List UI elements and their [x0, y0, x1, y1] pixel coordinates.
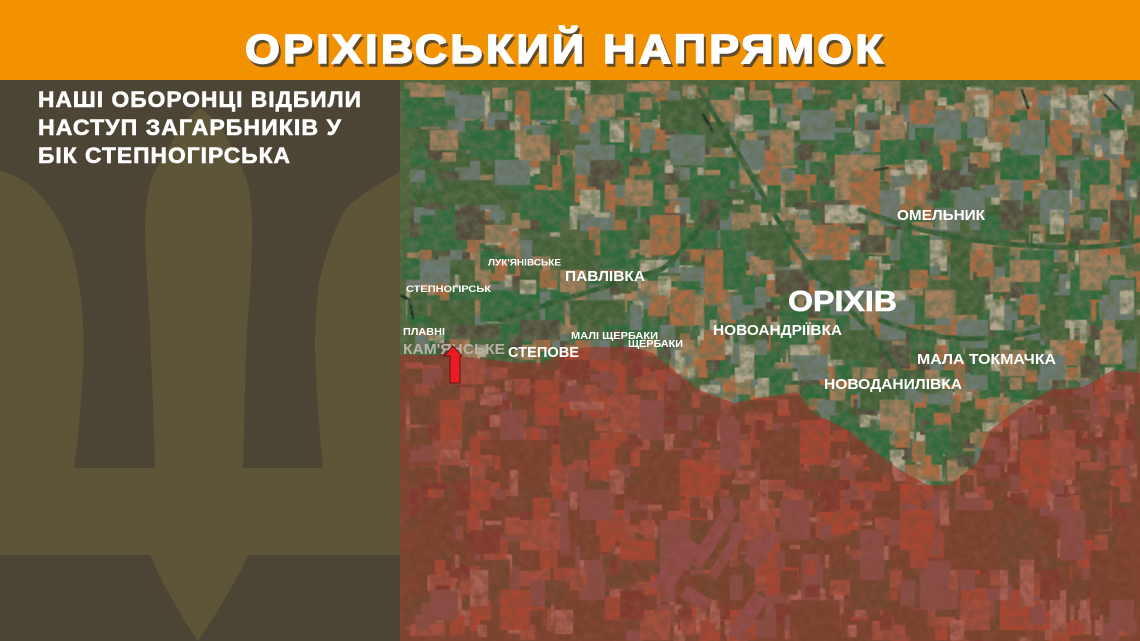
map labels: settlements: МАЛА ТОКМАЧКА	[917, 351, 1056, 368]
map labels: settlements	[403, 207, 1056, 393]
map labels: settlements: ПАВЛІВКА	[565, 268, 645, 285]
map labels: settlements: МАЛІ ЩЕРБАКИ	[571, 331, 658, 342]
text block: summary: НАШІ ОБОРОНЦІ ВІДБИЛИ	[38, 87, 362, 112]
map labels: settlements: НОВОДАНИЛІВКА	[824, 376, 962, 393]
map labels: settlements: ОРІХІВ	[788, 286, 897, 318]
text block: summary	[38, 87, 362, 168]
map labels: settlements: СТЕПНОГІРСЬК	[406, 284, 491, 295]
icon: trident watermark	[0, 108, 400, 641]
map: town texture	[400, 80, 1140, 641]
map fields: diagonal strips in the south	[652, 508, 779, 641]
map labels: settlements: ОМЕЛЬНИК	[897, 207, 986, 224]
map labels: settlements: НОВОАНДРІЇВКА	[713, 322, 843, 339]
map labels: settlements: СТЕПОВЕ	[508, 345, 579, 361]
map labels: settlements: ЩЕРБАКИ	[628, 339, 683, 350]
panel: left olive sidebar	[0, 80, 400, 641]
map fields: farmland patchwork	[402, 81, 1140, 641]
text block: summary: БІК СТЕПНОГІРСЬКА	[38, 143, 291, 168]
map labels: settlements: ПЛАВНІ	[403, 327, 445, 338]
map labels: settlements: КАМ'ЯНСЬКЕ	[403, 341, 505, 358]
occupied territory overlay	[400, 347, 1140, 641]
title: ОРІХІВСЬКИЙ НАПРЯМОК	[245, 26, 886, 72]
map: rivers and tree lines	[400, 90, 1140, 390]
panel: satellite map	[400, 80, 1140, 641]
arrow: red attack arrow	[444, 346, 462, 383]
text block: summary: НАСТУП ЗАГАРБНИКІВ У	[38, 115, 342, 140]
map labels: settlements: ЛУК'ЯНІВСЬКЕ	[488, 258, 561, 268]
header bar	[0, 0, 1140, 80]
